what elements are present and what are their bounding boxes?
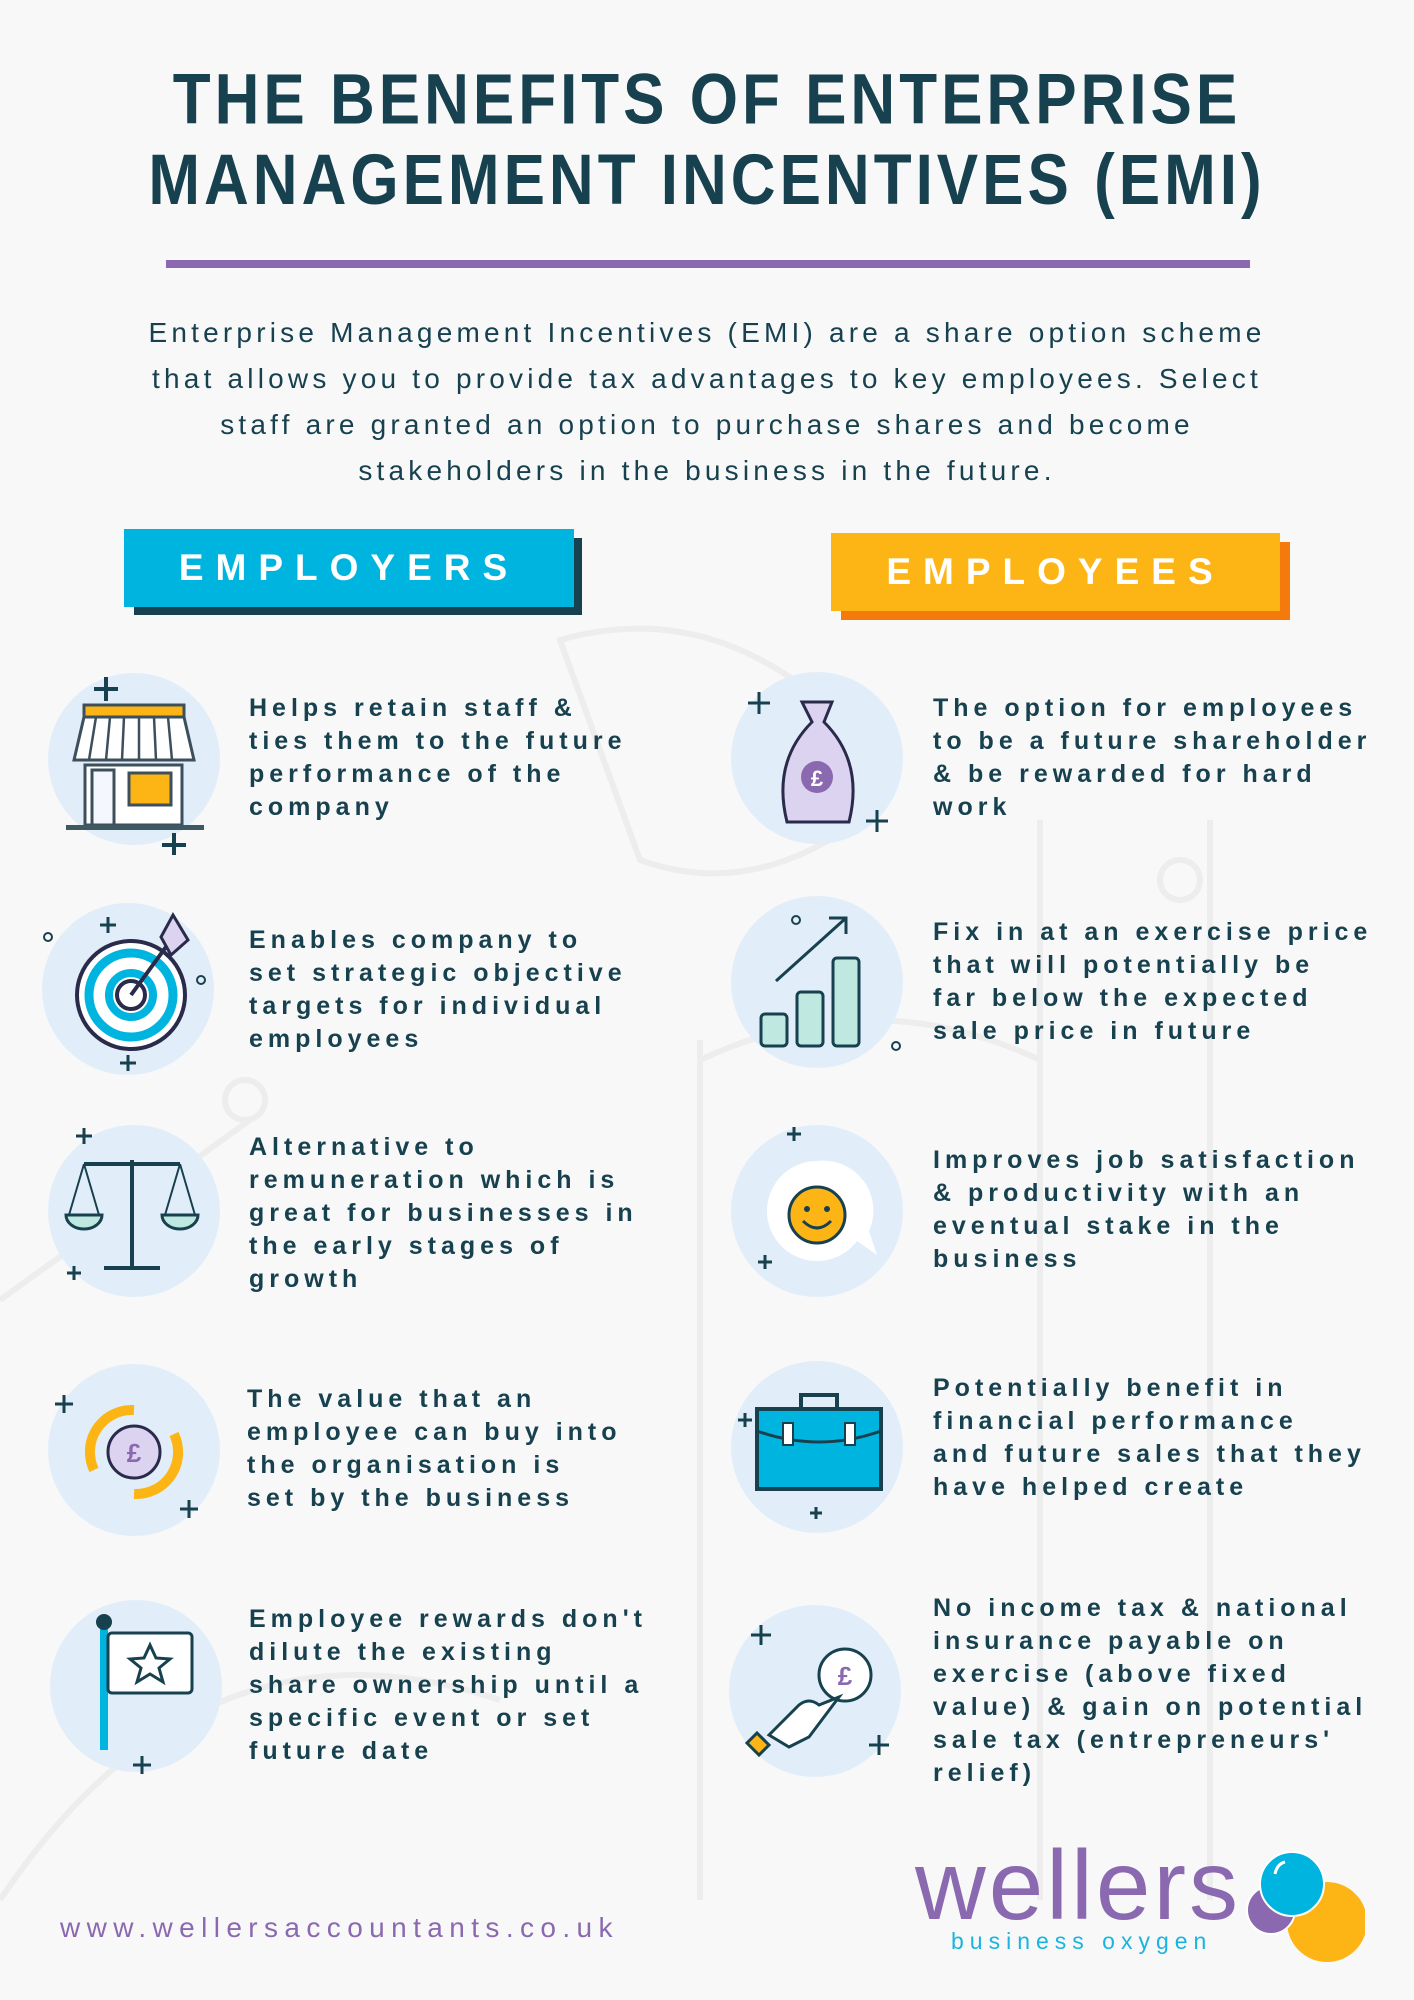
header: employers [124,529,582,615]
text: employee 2: Fix in at an exercise price [933,918,1372,946]
header: employees [831,533,1290,620]
text: employee 5: No income tax & national [933,1594,1352,1622]
icon: flag [50,1600,222,1774]
text: employee 4: have helped create [933,1473,1248,1501]
text: employee 2: far below the expected [933,984,1313,1012]
icon: hand with coin: £ [838,1661,853,1691]
header: employees: EMPLOYEES [886,551,1225,592]
icon: money bag: £ [811,766,824,791]
text: employer 2 [249,926,627,1053]
text: employee 5: insurance payable on [933,1627,1289,1655]
logo [914,1830,1365,1962]
intro text: staff are granted an option to purchase shares and become [220,409,1194,440]
intro text: stakeholders in the business in the future. [358,455,1056,486]
text: employer 1: Helps retain staff & [249,694,577,722]
text: employee 2 [933,918,1372,1045]
logo: wellers [915,1830,1241,1940]
icon: briefcase [731,1361,903,1533]
text: employee 4: Potentially benefit in [933,1374,1287,1402]
text: employee 4 [933,1374,1366,1501]
text: employer 3: growth [249,1265,362,1293]
text: employer 5: dilute the existing [249,1638,557,1666]
text: employee 3: business [933,1245,1081,1273]
text: employee 3 [933,1146,1359,1273]
text: employer 3 [249,1133,638,1293]
text: employee 3: & productivity with an [933,1179,1304,1207]
text: employer 5: specific event or set [249,1704,594,1732]
text: employer 3: great for businesses in [249,1199,638,1227]
logo: business oxygen [951,1928,1212,1954]
text: employee 5: value) & gain on potential [933,1693,1367,1721]
text: employer 4: the organisation is [247,1451,564,1479]
title: THE BENEFITS OF ENTERPRISE [173,60,1241,139]
text: employee 5: relief) [933,1759,1036,1787]
text: employee 1: to be a future shareholder [933,727,1371,755]
text: employer 1: ties them to the future [249,727,627,755]
icon: coin cycle: £ [127,1438,142,1468]
text: employer 2: set strategic objective [249,959,627,987]
icon: coin cycle [48,1364,220,1536]
title [148,60,1266,220]
text: employer 2: Enables company to [249,926,582,954]
text: employee 5: exercise (above fixed [933,1660,1291,1688]
header: employers: EMPLOYERS [179,547,519,588]
text: employee 4: and future sales that they [933,1440,1366,1468]
text: employer 3: remuneration which is [249,1166,619,1194]
icon: money bag [731,672,903,844]
icon: hand with coin [729,1605,901,1777]
text: employer 2: employees [249,1025,423,1053]
text: employee 3: Improves job satisfaction [933,1146,1359,1174]
text: employer 5: share ownership until a [249,1671,643,1699]
footer url: www.wellersaccountants.co.uk [60,1912,619,1943]
text: employee 1: & be rewarded for hard [933,760,1317,788]
text: employer 1: performance of the [249,760,565,788]
text: employer 5 [249,1605,647,1765]
icon: shop [48,673,220,855]
text: employer 2: targets for individual [249,992,606,1020]
text: employee 1: work [933,793,1011,821]
divider line [166,260,1250,268]
text: employer 1: company [249,793,394,821]
text: employee 1 [933,694,1371,821]
text: employee 2: sale price in future [933,1017,1255,1045]
intro text [148,317,1266,486]
text: employer 5: future date [249,1737,433,1765]
intro text: that allows you to provide tax advantages to key employees. Select [152,363,1262,394]
text: employee 4: financial performance [933,1407,1298,1435]
icon: growth chart [731,896,903,1068]
text: employee 5: sale tax (entrepreneurs' [933,1726,1334,1754]
text: employer 5: Employee rewards don't [249,1605,647,1633]
text: employer 4: The value that an [247,1385,536,1413]
text: employer 4: employee can buy into [247,1418,622,1446]
text: employer 4: set by the business [247,1484,574,1512]
text: employee 1: The option for employees [933,694,1357,722]
text: employer 3: Alternative to [249,1133,479,1161]
text: employer 3: the early stages of [249,1232,564,1260]
text: employee 2: that will potentially be [933,951,1314,979]
text: employer 4 [247,1385,622,1512]
text: employee 3: eventual stake in the [933,1212,1284,1240]
intro text: Enterprise Management Incentives (EMI) are a share option scheme [148,317,1266,348]
icon: scales [48,1125,220,1297]
text: employee 5 [933,1594,1367,1787]
text: employer 1 [249,694,627,821]
icon: target [42,903,214,1075]
icon: smiley bubble [731,1125,903,1297]
title: MANAGEMENT INCENTIVES (EMI) [148,140,1266,220]
